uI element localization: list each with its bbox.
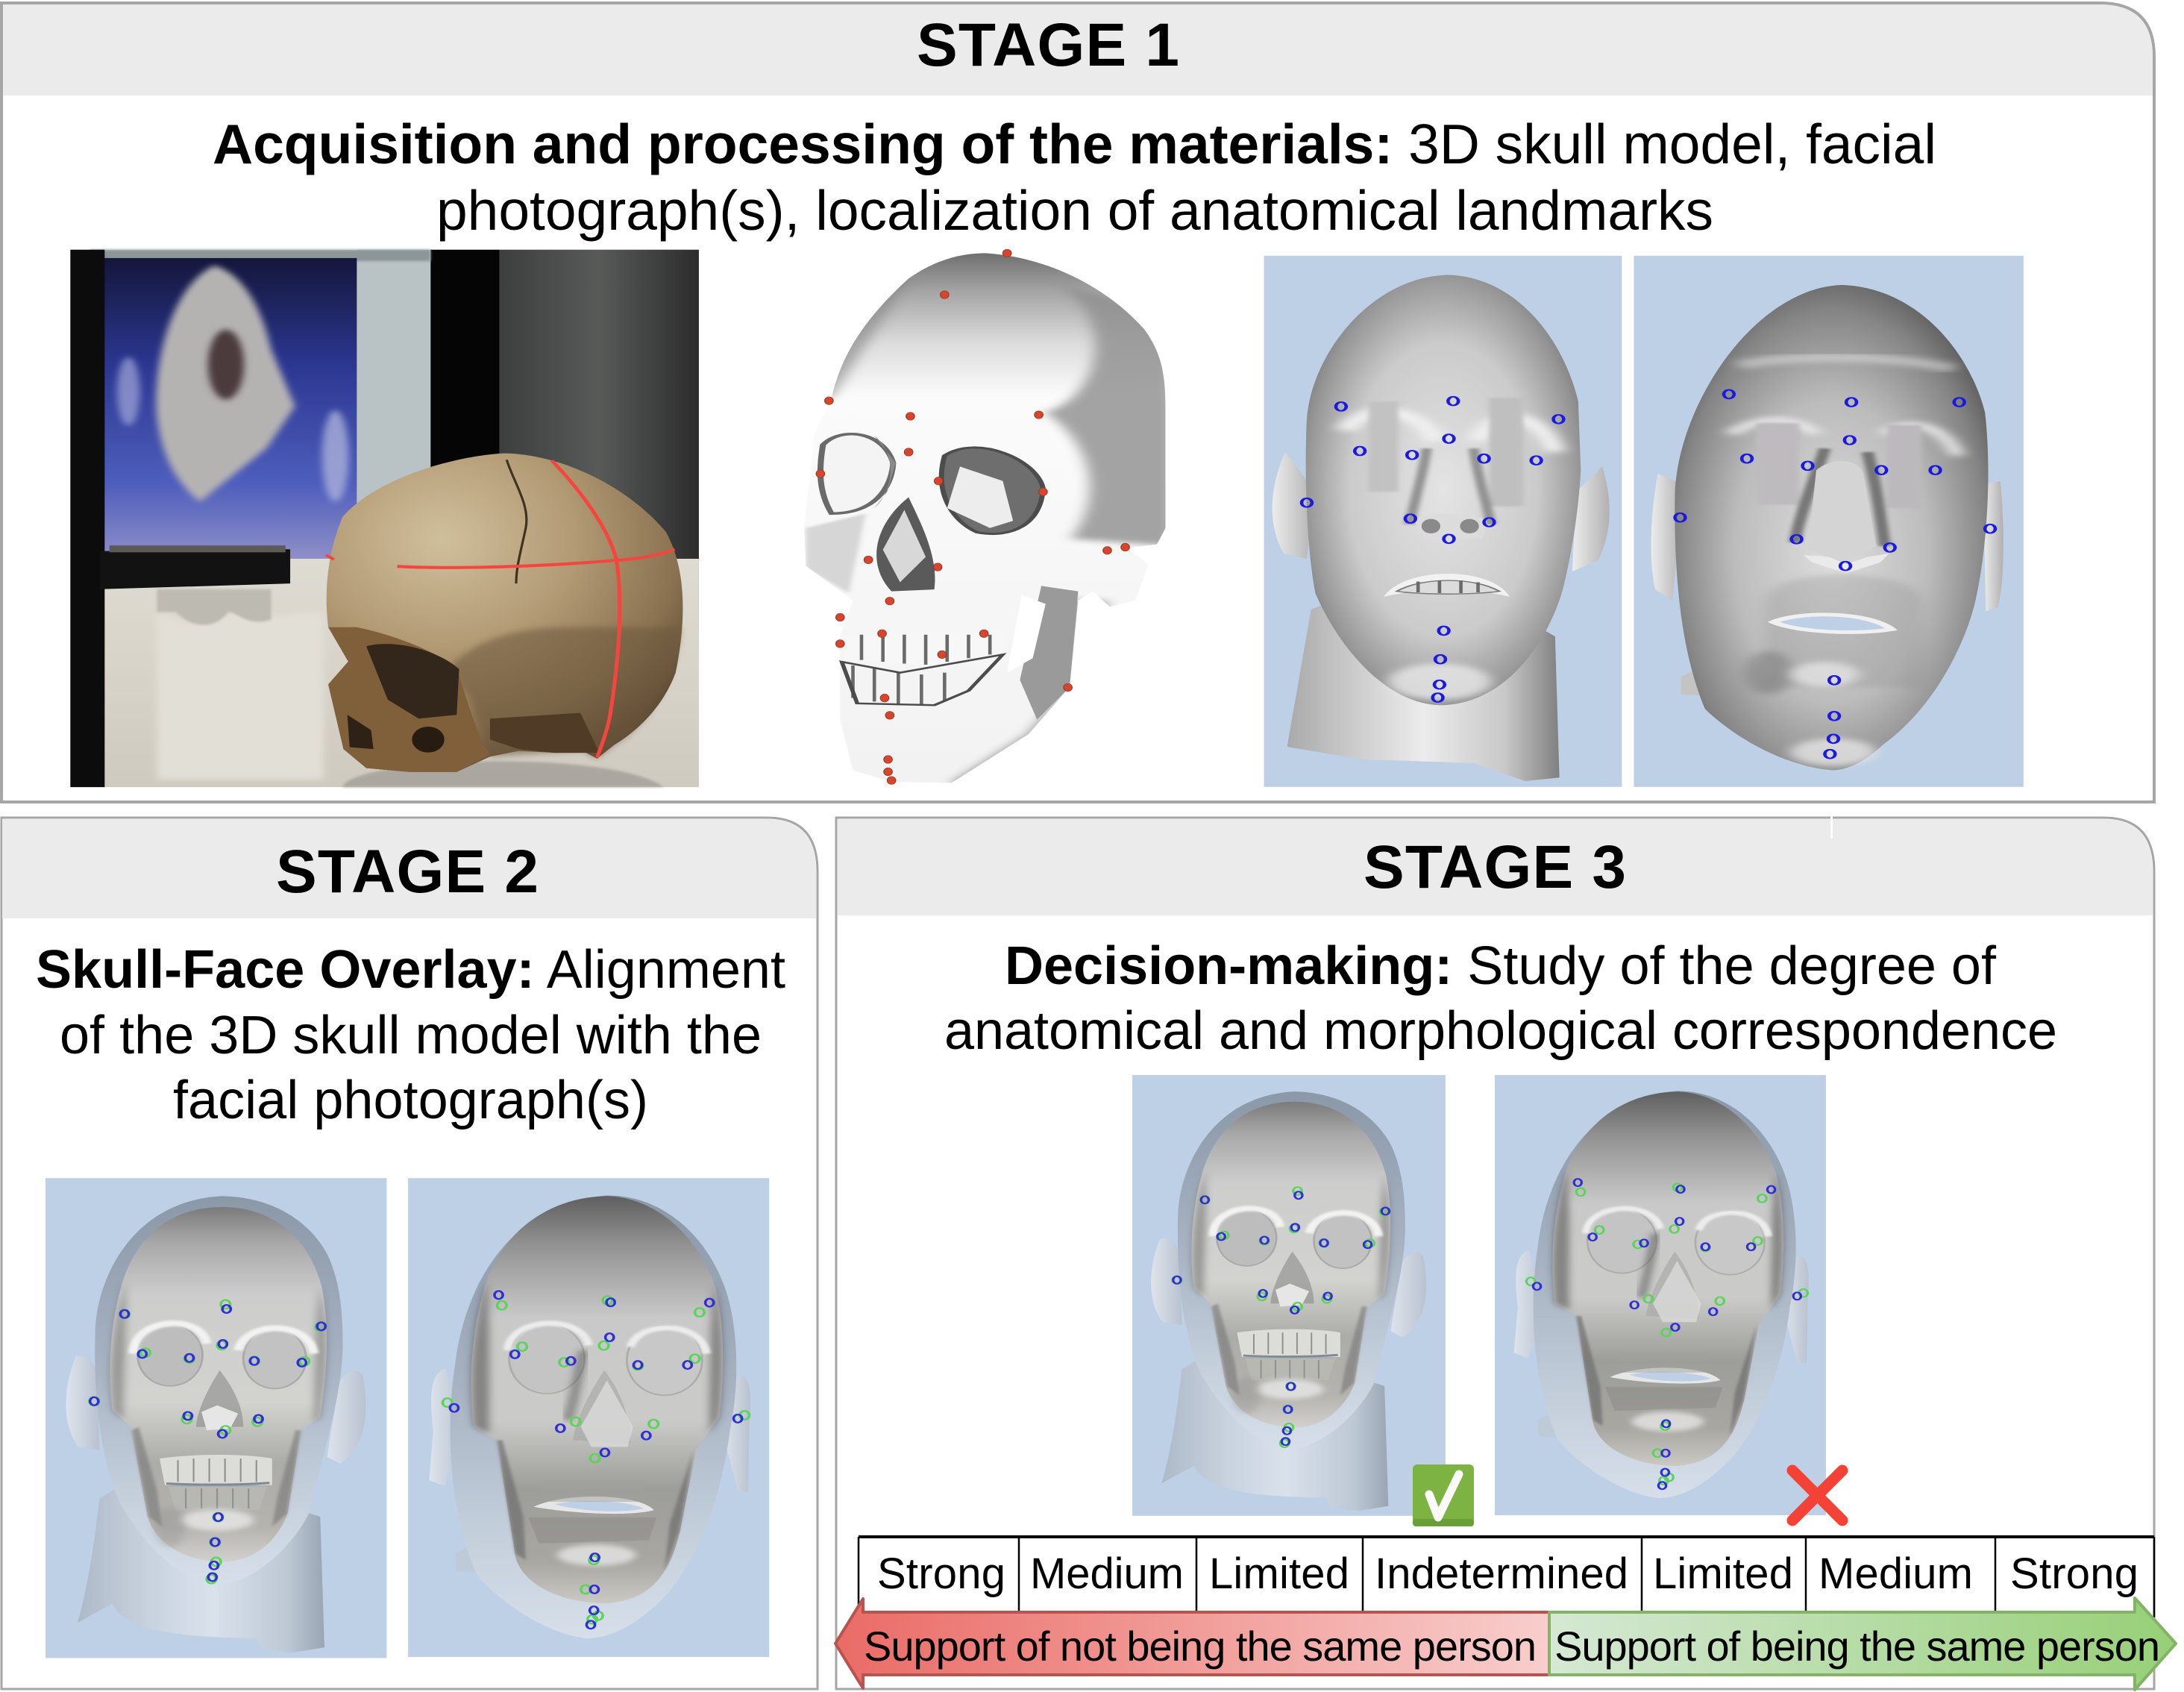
icon: red cross mark	[1792, 1470, 1842, 1520]
stage 2 description: Skull-Face Overlay: Alignment	[36, 940, 785, 1000]
stage 1 header band	[3, 4, 2153, 95]
heading: stage 2: STAGE 2	[276, 838, 539, 906]
panel: stage 1	[1, 3, 2154, 802]
stage 2 description: of the 3D skull model with the	[60, 1006, 762, 1065]
arrow: support of not being the same person: Support of not being the same person	[864, 1623, 1537, 1670]
scale label: medium (same person): Medium	[1819, 1550, 1973, 1598]
overlay image: non-match case	[1495, 1075, 1826, 1515]
overlay image: skull over face B	[408, 1178, 769, 1657]
scale label: strong (same person): Strong	[2010, 1550, 2138, 1598]
stage 1 description	[213, 113, 1936, 242]
scale label: limited (same person): Limited	[1653, 1550, 1793, 1598]
arrow: support of being the same person: Support of being the same person	[1554, 1623, 2160, 1670]
3D skull model with red landmarks	[797, 249, 1174, 795]
stage 2 description: facial photograph(s)	[173, 1071, 648, 1130]
panel: stage 2	[1, 818, 818, 1689]
heading: stage 3: STAGE 3	[1364, 833, 1626, 901]
scale label: limited (not same person): Limited	[1209, 1550, 1349, 1598]
arrow: support of not being the same person	[835, 1599, 1549, 1688]
stage 3 description	[944, 936, 2057, 1061]
scale label: indetermined: Indetermined	[1375, 1550, 1628, 1598]
scale label: strong (not same person): Strong	[877, 1550, 1005, 1598]
3D face scan B with blue landmarks	[1634, 256, 2024, 787]
icon: green check mark	[1413, 1464, 1474, 1526]
3D face scan A with blue landmarks	[1264, 256, 1622, 787]
stage 3 header band	[838, 819, 2153, 915]
stage 1 description: photograph(s), localization of anatomical landmarks	[436, 179, 1713, 242]
stage 2 description	[36, 940, 785, 1130]
overlay image: skull over face A	[46, 1178, 386, 1658]
stage 3 description: anatomical and morphological correspondence	[944, 1001, 2057, 1061]
support scale table	[859, 1537, 2154, 1626]
scale label: medium (not same person): Medium	[1030, 1550, 1184, 1598]
heading: stage 1: STAGE 1	[917, 11, 1179, 79]
overlay image: match case	[1132, 1075, 1446, 1516]
stage 2 header band	[2, 819, 816, 918]
arrow: support of being the same person	[1549, 1598, 2176, 1690]
stage 1 description: Acquisition and processing of the materials: 3D skull model, facial	[213, 113, 1936, 175]
panel: stage 3	[835, 816, 2176, 1690]
photo: real skull under laser scanner	[70, 250, 699, 787]
stage 3 description: Decision-making: Study of the degree of	[1005, 936, 1997, 996]
